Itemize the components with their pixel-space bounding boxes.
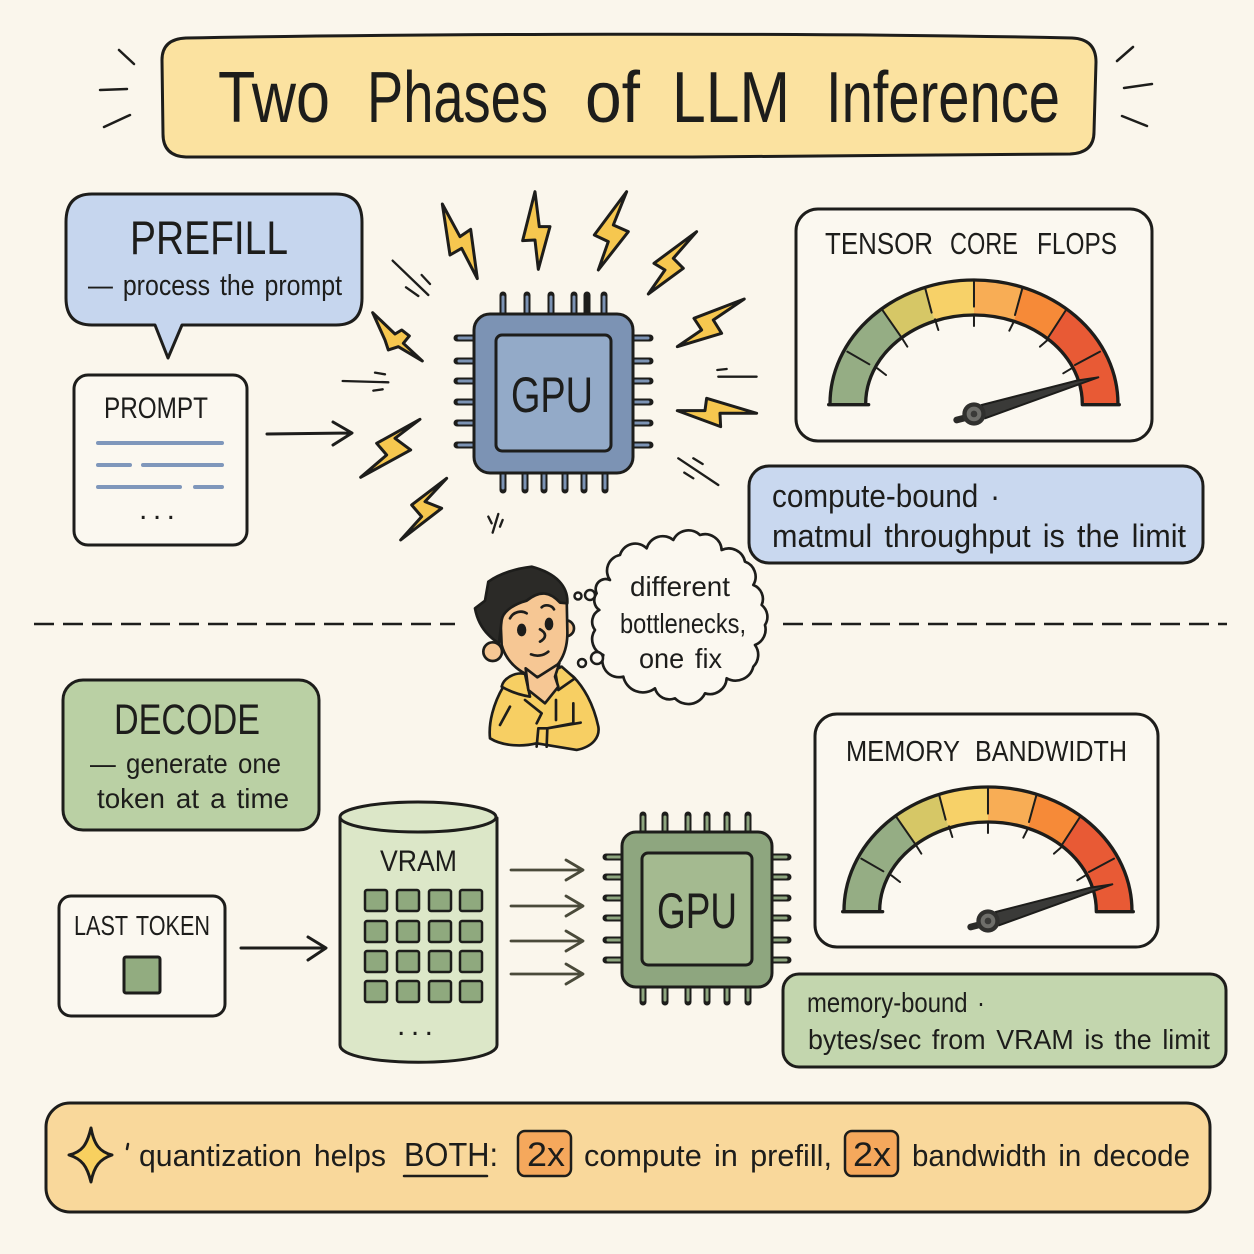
gauge title: FLOPS xyxy=(1037,226,1117,261)
panel: quantization takeaway bar xyxy=(46,1103,1210,1212)
title text: LLM xyxy=(672,58,790,138)
green GPU label: GPU xyxy=(657,883,737,939)
title emphasis marks xyxy=(100,47,1152,127)
2x badge: compute xyxy=(518,1131,571,1176)
title banner xyxy=(162,34,1096,158)
icon: green GPU chip xyxy=(606,815,788,1002)
2x badge: bandwidth: 2x xyxy=(853,1136,891,1174)
thought text line 1: different xyxy=(630,571,730,602)
2x badge: bandwidth xyxy=(845,1131,898,1176)
gauge title xyxy=(825,226,1117,261)
decode description line 2: token at a time xyxy=(97,783,289,814)
thought text line 2: bottlenecks, xyxy=(620,608,746,639)
last token label: LAST TOKEN xyxy=(74,910,210,941)
callout: compute-bound xyxy=(749,466,1203,563)
compute text: compute in prefill, xyxy=(584,1138,832,1173)
panel: prefill speech bubble xyxy=(66,194,362,358)
energy spark marks xyxy=(343,261,757,533)
blue GPU label: GPU xyxy=(511,367,593,423)
panel: decode box xyxy=(63,680,319,830)
VRAM ellipsis: ... xyxy=(397,1009,433,1042)
icon: lightning bolts around GPU xyxy=(361,192,757,540)
callout line 2: matmul throughput is the limit xyxy=(772,518,1186,554)
prompt ellipsis: ... xyxy=(139,493,175,526)
title text xyxy=(218,58,1060,138)
title text: Two xyxy=(218,58,330,138)
prompt label: PROMPT xyxy=(104,392,208,425)
bandwidth text: bandwidth in decode xyxy=(912,1138,1190,1173)
arrows: VRAM to GPU xyxy=(511,860,583,984)
character: thinking person xyxy=(475,567,599,750)
prefill description: — process the prompt xyxy=(88,270,342,302)
callout line 2: bytes/sec from VRAM is the limit xyxy=(808,1024,1210,1055)
compute gauge dial xyxy=(829,280,1119,426)
callout line 1: compute-bound · xyxy=(772,478,1000,514)
prompt text lines xyxy=(98,443,222,487)
panel: prompt document xyxy=(74,375,247,545)
arrow: last token to VRAM xyxy=(241,937,326,960)
memory cell grid xyxy=(365,890,482,1002)
memory gauge dial xyxy=(843,787,1133,933)
thought text line 3: one fix xyxy=(639,643,722,674)
gauge title: CORE xyxy=(950,226,1018,261)
emphasised word: BOTH: xyxy=(404,1136,498,1173)
gauge title: MEMORY xyxy=(846,736,960,768)
title text: of xyxy=(585,58,641,138)
panel: tensor core flops gauge xyxy=(796,209,1152,441)
takeaway text start: quantization helps xyxy=(139,1138,386,1173)
arrow: prompt to GPU xyxy=(267,422,352,445)
title text: Phases xyxy=(367,58,548,138)
icon: VRAM cylinder xyxy=(340,802,497,1062)
icon: blue GPU chip xyxy=(457,295,650,490)
panel: memory bandwidth gauge xyxy=(815,714,1158,947)
VRAM label: VRAM xyxy=(380,845,457,878)
2x badge: compute: 2x xyxy=(527,1136,565,1174)
gauge title: TENSOR xyxy=(825,226,933,261)
section divider xyxy=(34,623,1227,625)
thought bubble xyxy=(574,530,767,704)
prefill heading: PREFILL xyxy=(130,211,288,264)
thought trail circles xyxy=(574,590,603,667)
decode description line 1: — generate one xyxy=(90,748,281,779)
gauge title: BANDWIDTH xyxy=(975,736,1127,768)
gauge title xyxy=(846,736,1127,768)
sparkle tick xyxy=(127,1144,128,1149)
panel: last token xyxy=(59,896,225,1016)
decode heading: DECODE xyxy=(114,696,260,744)
callout: memory-bound xyxy=(783,974,1226,1067)
callout line 1: memory-bound · xyxy=(807,987,985,1018)
title text: Inference xyxy=(826,58,1060,138)
icon: sparkle xyxy=(69,1128,112,1182)
token square xyxy=(124,957,160,993)
